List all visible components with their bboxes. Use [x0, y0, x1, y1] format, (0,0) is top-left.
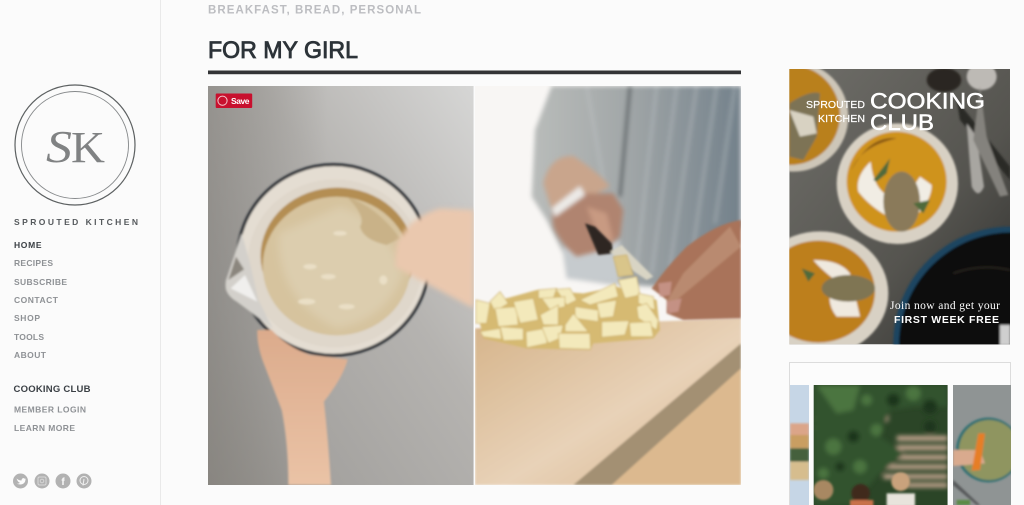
icon: pinterest — [76, 474, 92, 488]
title: FOR MY GIRL — [208, 37, 358, 64]
batter — [261, 188, 414, 335]
banana chunks — [476, 255, 660, 350]
ad headline — [806, 88, 985, 135]
main navigation — [14, 240, 67, 360]
icon: twitter — [13, 474, 28, 488]
widget: photo gallery — [790, 362, 1021, 505]
bowl spout — [225, 233, 273, 328]
sidebar — [0, 0, 161, 505]
ad headline: CLUB — [870, 110, 934, 135]
ad headline: COOKING — [870, 88, 985, 114]
main navigation: CONTACT — [14, 295, 59, 305]
pinterest save button: Save — [231, 96, 250, 106]
icon: facebook: f — [61, 477, 65, 488]
logo: SK monogram: S — [46, 121, 72, 172]
knife — [585, 223, 653, 280]
title rule — [208, 70, 741, 75]
pinterest save button — [216, 94, 252, 108]
main navigation: TOOLS — [14, 332, 44, 342]
hand and forearm holding the bowl — [257, 330, 348, 485]
holding hand — [652, 220, 741, 320]
gallery photo: garden wall with children — [813, 385, 948, 505]
bowl: center — [837, 123, 958, 244]
main navigation: RECIPES — [14, 258, 53, 268]
gallery photo: left — [790, 385, 809, 505]
hand holding spoon — [395, 208, 474, 308]
main navigation: HOME — [14, 240, 42, 250]
chopping hand — [543, 156, 623, 257]
brand name: SPROUTED KITCHEN — [14, 217, 138, 227]
wood board and counter — [475, 318, 741, 485]
ad headline: SPROUTED — [806, 99, 865, 111]
blurred shirt — [532, 86, 741, 287]
main navigation: ABOUT — [14, 350, 47, 360]
ad call to action — [890, 300, 1000, 326]
bowl: bottom left — [752, 231, 888, 355]
post categories: BREAKFAST, BREAD, PERSONAL — [208, 4, 421, 16]
photo: chopping banana on a wood board — [475, 86, 741, 485]
spoon — [347, 197, 400, 245]
cutlery — [927, 63, 1010, 197]
bowl: top left — [789, 69, 850, 173]
dark pan — [893, 227, 1024, 460]
ad: cooking club — [789, 69, 1010, 344]
cooking club navigation: MEMBER LOGIN — [14, 404, 86, 414]
children — [813, 472, 915, 505]
social icons — [13, 474, 92, 488]
logo: SK monogram — [15, 85, 135, 205]
ad headline: KITCHEN — [818, 113, 865, 125]
ad call to action: FIRST WEEK FREE — [894, 314, 999, 326]
icon: pinterest logo — [218, 96, 227, 105]
logo: SK monogram: K — [71, 123, 105, 172]
main navigation: SUBSCRIBE — [14, 277, 67, 287]
glass bowl — [237, 165, 429, 355]
main navigation: SHOP — [14, 313, 40, 323]
cooking club navigation: LEARN MORE — [14, 423, 75, 433]
icon: instagram — [34, 474, 50, 488]
ad call to action: Join now and get your — [890, 300, 1000, 312]
cooking club navigation: COOKING CLUB — [14, 384, 91, 395]
gallery photo: green dip — [953, 385, 1011, 505]
photo: mixing batter in a glass bowl — [208, 86, 474, 485]
cooking club navigation — [14, 384, 91, 433]
